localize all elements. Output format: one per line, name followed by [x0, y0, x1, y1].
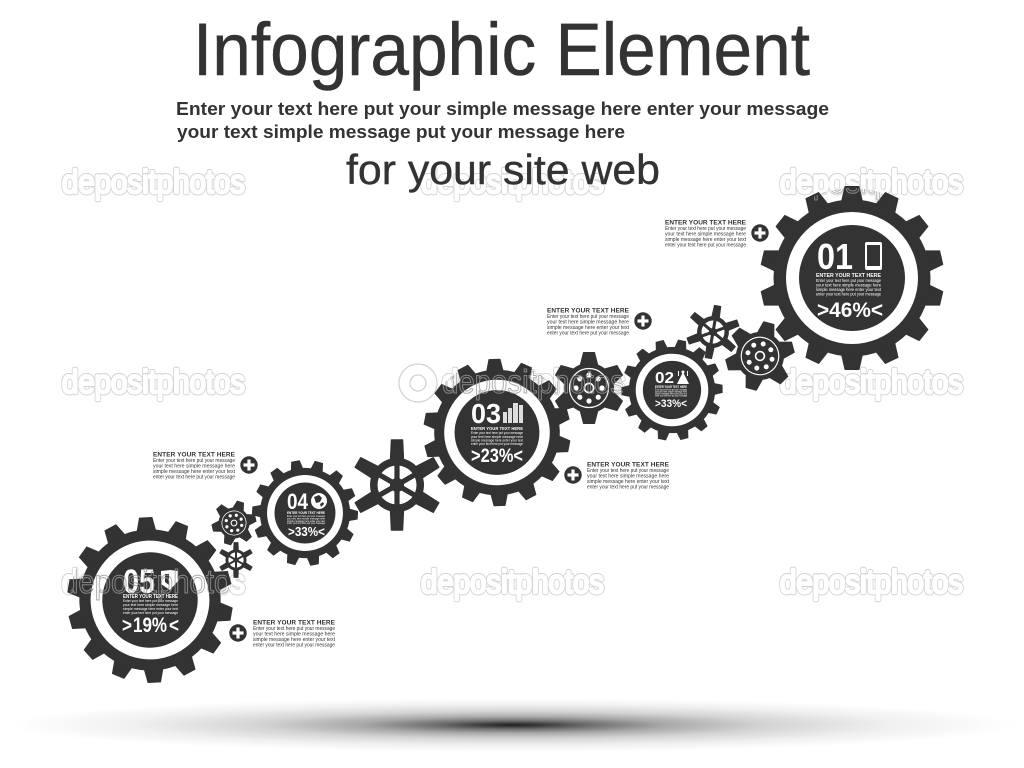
gear 04 text: enter your text here put your message — [287, 521, 325, 525]
callout 03 — [587, 462, 670, 490]
gear 01 text: ENTER YOUR TEXT HERE — [816, 273, 881, 279]
gear 04 text — [287, 511, 326, 525]
gear 01 text — [816, 273, 882, 296]
gear 03 text: enter your text here put your message — [471, 442, 523, 446]
callout 04: ENTER YOUR TEXT HERE — [153, 452, 236, 458]
watermarks: depositphotos — [62, 163, 245, 200]
icon: smartphone — [865, 242, 882, 270]
gear 02 text — [655, 385, 688, 398]
percentage 46: >46%< — [817, 299, 883, 322]
watermarks over gears: depositphotos — [62, 563, 245, 600]
watermarks: depositphotos — [421, 163, 604, 200]
gear 02 text: Enter your text here put your message — [655, 389, 688, 392]
watermarks: depositphotos — [442, 363, 625, 400]
gear 03 text: simple message here enter your text — [471, 438, 523, 442]
gear 05 — [63, 513, 237, 687]
callout 02: simple message here enter your text — [547, 325, 630, 331]
watermarks: depositphotos — [62, 563, 245, 600]
intro text: your text simple message put your message here — [177, 122, 625, 142]
watermarks: depositphotos — [62, 163, 245, 200]
callout 01: simple message here enter your text — [665, 237, 747, 243]
dotted gear lower left — [207, 496, 261, 550]
icon: globe — [311, 493, 327, 509]
dotted gear upper right — [718, 314, 802, 398]
gear 05 text: enter your text here put your message — [123, 611, 178, 615]
spoked gear upper right — [684, 302, 742, 362]
gear 04 text: simple message here enter your text — [287, 519, 325, 523]
icon: plus 05 — [229, 624, 247, 642]
gear 05 text: simple message here enter your text — [123, 607, 178, 611]
watermarks: depositphotos — [62, 563, 245, 600]
dotted gear center — [554, 352, 624, 424]
gear 04 — [240, 448, 370, 578]
callout 05: your text here simple message here — [253, 632, 335, 638]
gear 03 — [421, 357, 573, 508]
callout 05: Enter your text here put your message — [253, 626, 335, 632]
callout 04: Enter your text here put your message — [153, 458, 235, 464]
intro text: Enter your text here put your simple message here enter your message — [176, 99, 829, 119]
gear 02 text: your text here simple message here — [655, 391, 688, 394]
watermarks: depositphotos — [62, 363, 245, 400]
watermarks over gears — [70, 188, 884, 600]
gear 02 text: simple message here enter your text — [655, 393, 687, 396]
callout 05: simple message here enter your text — [253, 637, 336, 643]
spoked gear lower left — [220, 542, 252, 578]
gear 03 text: ENTER YOUR TEXT HERE — [471, 426, 523, 431]
callout 05: enter your text here put your message — [253, 642, 335, 648]
gear 01 text: enter your text here put your message — [816, 292, 882, 296]
number 01: 01 — [817, 236, 853, 277]
percentage 23: >23%< — [471, 446, 523, 467]
icon: shield — [161, 570, 178, 590]
callout 03: your text here simple message here — [587, 474, 669, 480]
callout 03: simple message here enter your text — [587, 479, 670, 485]
callout 04: simple message here enter your text — [153, 469, 236, 475]
gear 01 — [760, 186, 944, 370]
gear 01 text: simple message here enter your text — [816, 287, 882, 292]
callout 05: ENTER YOUR TEXT HERE — [253, 620, 336, 626]
gear 01 text: Enter your text here put your message — [816, 278, 882, 283]
number 03: 03 — [471, 398, 501, 429]
gear 05 text — [123, 594, 179, 615]
gear 03 text: your text here simple message here — [471, 435, 523, 439]
number 02: 02 — [655, 370, 674, 387]
icon: buildings — [503, 403, 523, 423]
percentage 19: < — [169, 615, 179, 637]
percentage 19: 19% — [133, 614, 167, 637]
intro text — [176, 99, 829, 142]
watermarks — [62, 163, 963, 600]
watermarks: depositphotos — [421, 563, 604, 600]
number 05: 05 — [123, 563, 155, 601]
number 04: 04 — [287, 489, 309, 514]
callout 02: enter your text here put your message — [547, 330, 629, 336]
gear 03 text: Enter your text here put your message — [471, 431, 523, 435]
gear 04 text: Enter your text here put your message — [287, 514, 325, 518]
callout 01 — [665, 220, 747, 248]
spoked gear large — [355, 440, 439, 530]
gear 02 text: ENTER YOUR TEXT HERE — [655, 385, 687, 389]
callout 01: your text here simple message here — [665, 232, 746, 238]
watermarks: depositphotos — [780, 563, 963, 600]
subtitle: for your site web — [346, 146, 660, 193]
watermarks: depositphotos — [421, 563, 604, 600]
callout 01: ENTER YOUR TEXT HERE — [665, 220, 747, 226]
icon: plus 02 — [634, 312, 652, 330]
percentage 19: > — [122, 615, 132, 637]
callout 01: enter your text here put your message — [665, 242, 746, 248]
icon: plus 03 — [564, 466, 582, 484]
gear 01 text: your text here simple message here — [816, 282, 882, 288]
percentage 33: >33%< — [655, 398, 687, 410]
watermarks: depositphotos — [780, 363, 963, 400]
icon: radio tower — [677, 370, 689, 384]
icon: plus 04 — [240, 456, 258, 474]
watermarks: depositphotos — [780, 363, 963, 400]
callout 01: Enter your text here put your message — [665, 226, 746, 232]
watermarks over gears: depositphotos — [780, 363, 963, 400]
icon: plus 01 — [751, 224, 769, 242]
gear 02 text: enter your text here put your message — [655, 395, 688, 398]
gear 04 text: ENTER YOUR TEXT HERE — [287, 511, 326, 515]
percentage 33: >33%< — [288, 524, 325, 539]
watermarks: depositphotos — [442, 363, 625, 400]
callout 02: ENTER YOUR TEXT HERE — [547, 308, 630, 314]
callout 02 — [547, 308, 630, 336]
callout 03: enter your text here put your message — [587, 484, 669, 490]
ground shadow — [8, 698, 1018, 752]
watermarks: depositphotos — [780, 563, 963, 600]
callout 03: ENTER YOUR TEXT HERE — [587, 462, 670, 468]
gear 04 text: your text here simple message here — [287, 516, 325, 520]
gear 05 text: Enter your text here put your message — [123, 599, 178, 603]
gear 05 text: ENTER YOUR TEXT HERE — [123, 594, 179, 600]
watermarks over gears: depositphotos — [780, 163, 963, 200]
callout 02: Enter your text here put your message — [547, 314, 629, 320]
watermarks: depositphotos — [421, 163, 604, 200]
gear 03 text — [471, 426, 523, 446]
watermarks: depositphotos — [780, 163, 963, 200]
callout 04 — [153, 452, 236, 480]
callout 05 — [253, 620, 336, 648]
watermarks: depositphotos — [780, 163, 963, 200]
callout 02: your text here simple message here — [547, 320, 629, 326]
watermarks over gears: depositphotos — [442, 363, 625, 400]
gear 05 text: your text here simple message here — [123, 603, 178, 607]
callout 04: enter your text here put your message — [153, 474, 235, 480]
callout 04: your text here simple message here — [153, 464, 235, 470]
watermarks: depositphotos — [62, 363, 245, 400]
gear 02 — [613, 331, 731, 449]
title: Infographic Element — [193, 8, 810, 91]
callout 03: Enter your text here put your message — [587, 468, 669, 474]
